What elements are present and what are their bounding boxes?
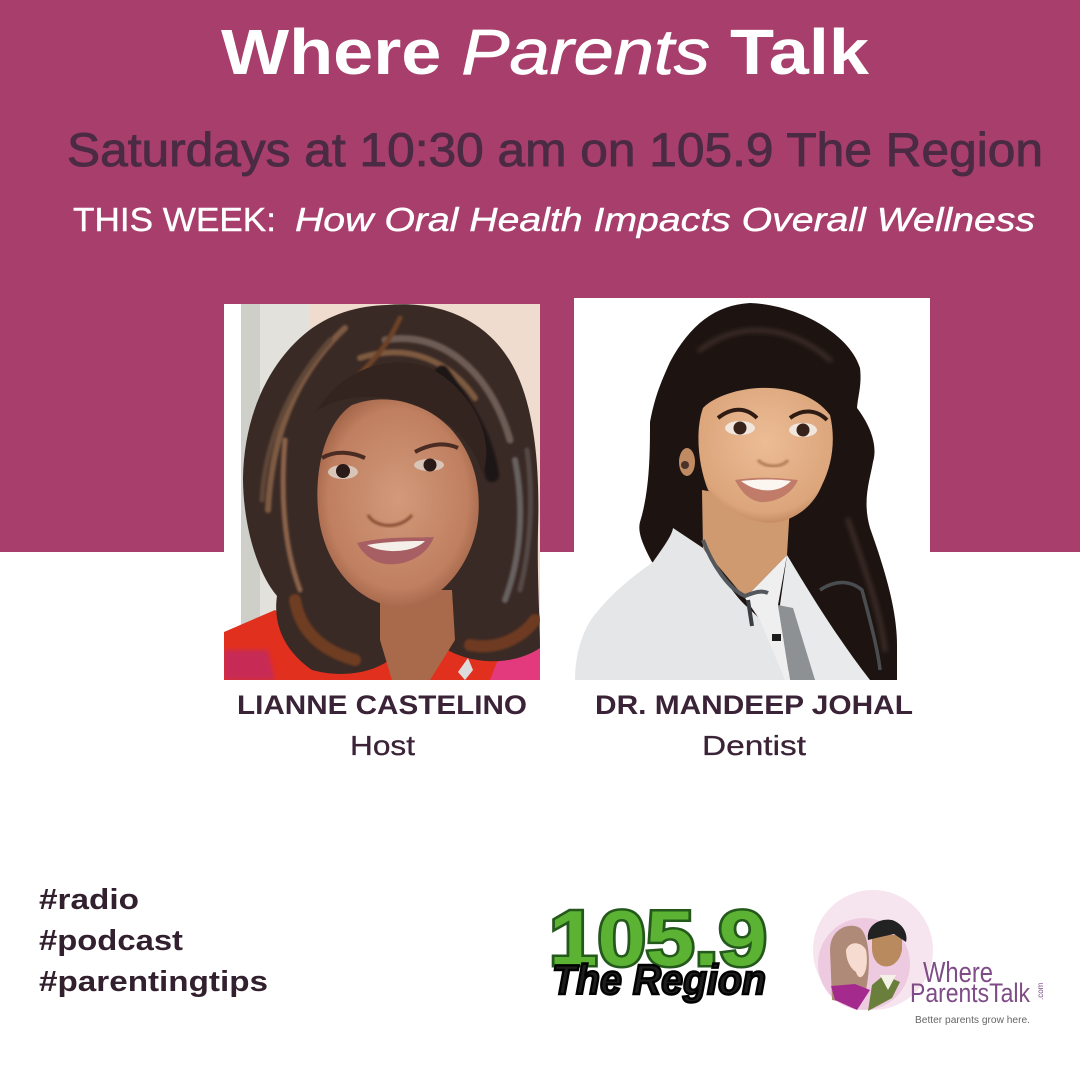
subtitle: broadcast time: Saturdays at 10:30 am on 105.9 The Region: [67, 123, 1043, 176]
logo: 105.9 The Region: The Region: [552, 956, 766, 1003]
background panel: magenta header: [0, 0, 1080, 552]
title: Where Parents Talk: [221, 16, 869, 88]
logo wordmark: Where: [923, 957, 993, 989]
nose and mouth: [368, 515, 412, 526]
mouth: [735, 478, 798, 502]
hair back: [243, 304, 540, 674]
logo circles: [813, 890, 933, 1010]
hashtags: #radio: [39, 884, 139, 916]
logo: Where Parents Talk: .com: [1036, 982, 1045, 1000]
hashtags: #parentingtips: [39, 966, 268, 998]
role: Host: Host: [350, 730, 415, 761]
white coat: [575, 528, 785, 680]
photo: Dr. Mandeep Johal: [574, 298, 930, 680]
logo tagline: Better parents grow here.: [915, 1015, 1030, 1026]
brows and eyes: [718, 410, 757, 418]
face: [317, 399, 479, 607]
stethoscope: [703, 540, 768, 596]
fringe: [348, 366, 486, 469]
neck: [380, 590, 455, 680]
eyebrows, eyes: [322, 453, 365, 458]
neck: [702, 490, 790, 598]
man illustration: [868, 920, 906, 1011]
this week topic: How Oral Health Impacts Overall Wellness: [295, 201, 1035, 238]
face: [698, 388, 833, 523]
hair: [639, 303, 897, 680]
hashtags: #podcast: [39, 925, 183, 957]
hair highlights: [262, 318, 535, 660]
hashtags: [39, 884, 268, 998]
hair sheen: [700, 330, 885, 650]
blouse: [745, 555, 790, 680]
name: Dr. Mandeep Johal: DR. MANDEEP JOHAL: [595, 690, 913, 720]
woman illustration: [830, 926, 870, 1010]
this week topic: [73, 201, 1035, 238]
logo: Where Parents Talk: ParentsTalk: [910, 978, 1030, 1008]
shirt: [224, 610, 500, 680]
logo: Where Parents Talk: [813, 890, 1045, 1026]
nose: [758, 460, 788, 466]
ear and earring: [679, 448, 695, 476]
role: Dentist: Dentist: [702, 730, 806, 761]
logo: 105.9 The Region: 105.9: [549, 894, 767, 982]
photo: Lianne Castelino: [224, 304, 540, 680]
this week topic: THIS WEEK:: [73, 201, 276, 238]
name: Lianne Castelino: LIANNE CASTELINO: [237, 690, 527, 720]
